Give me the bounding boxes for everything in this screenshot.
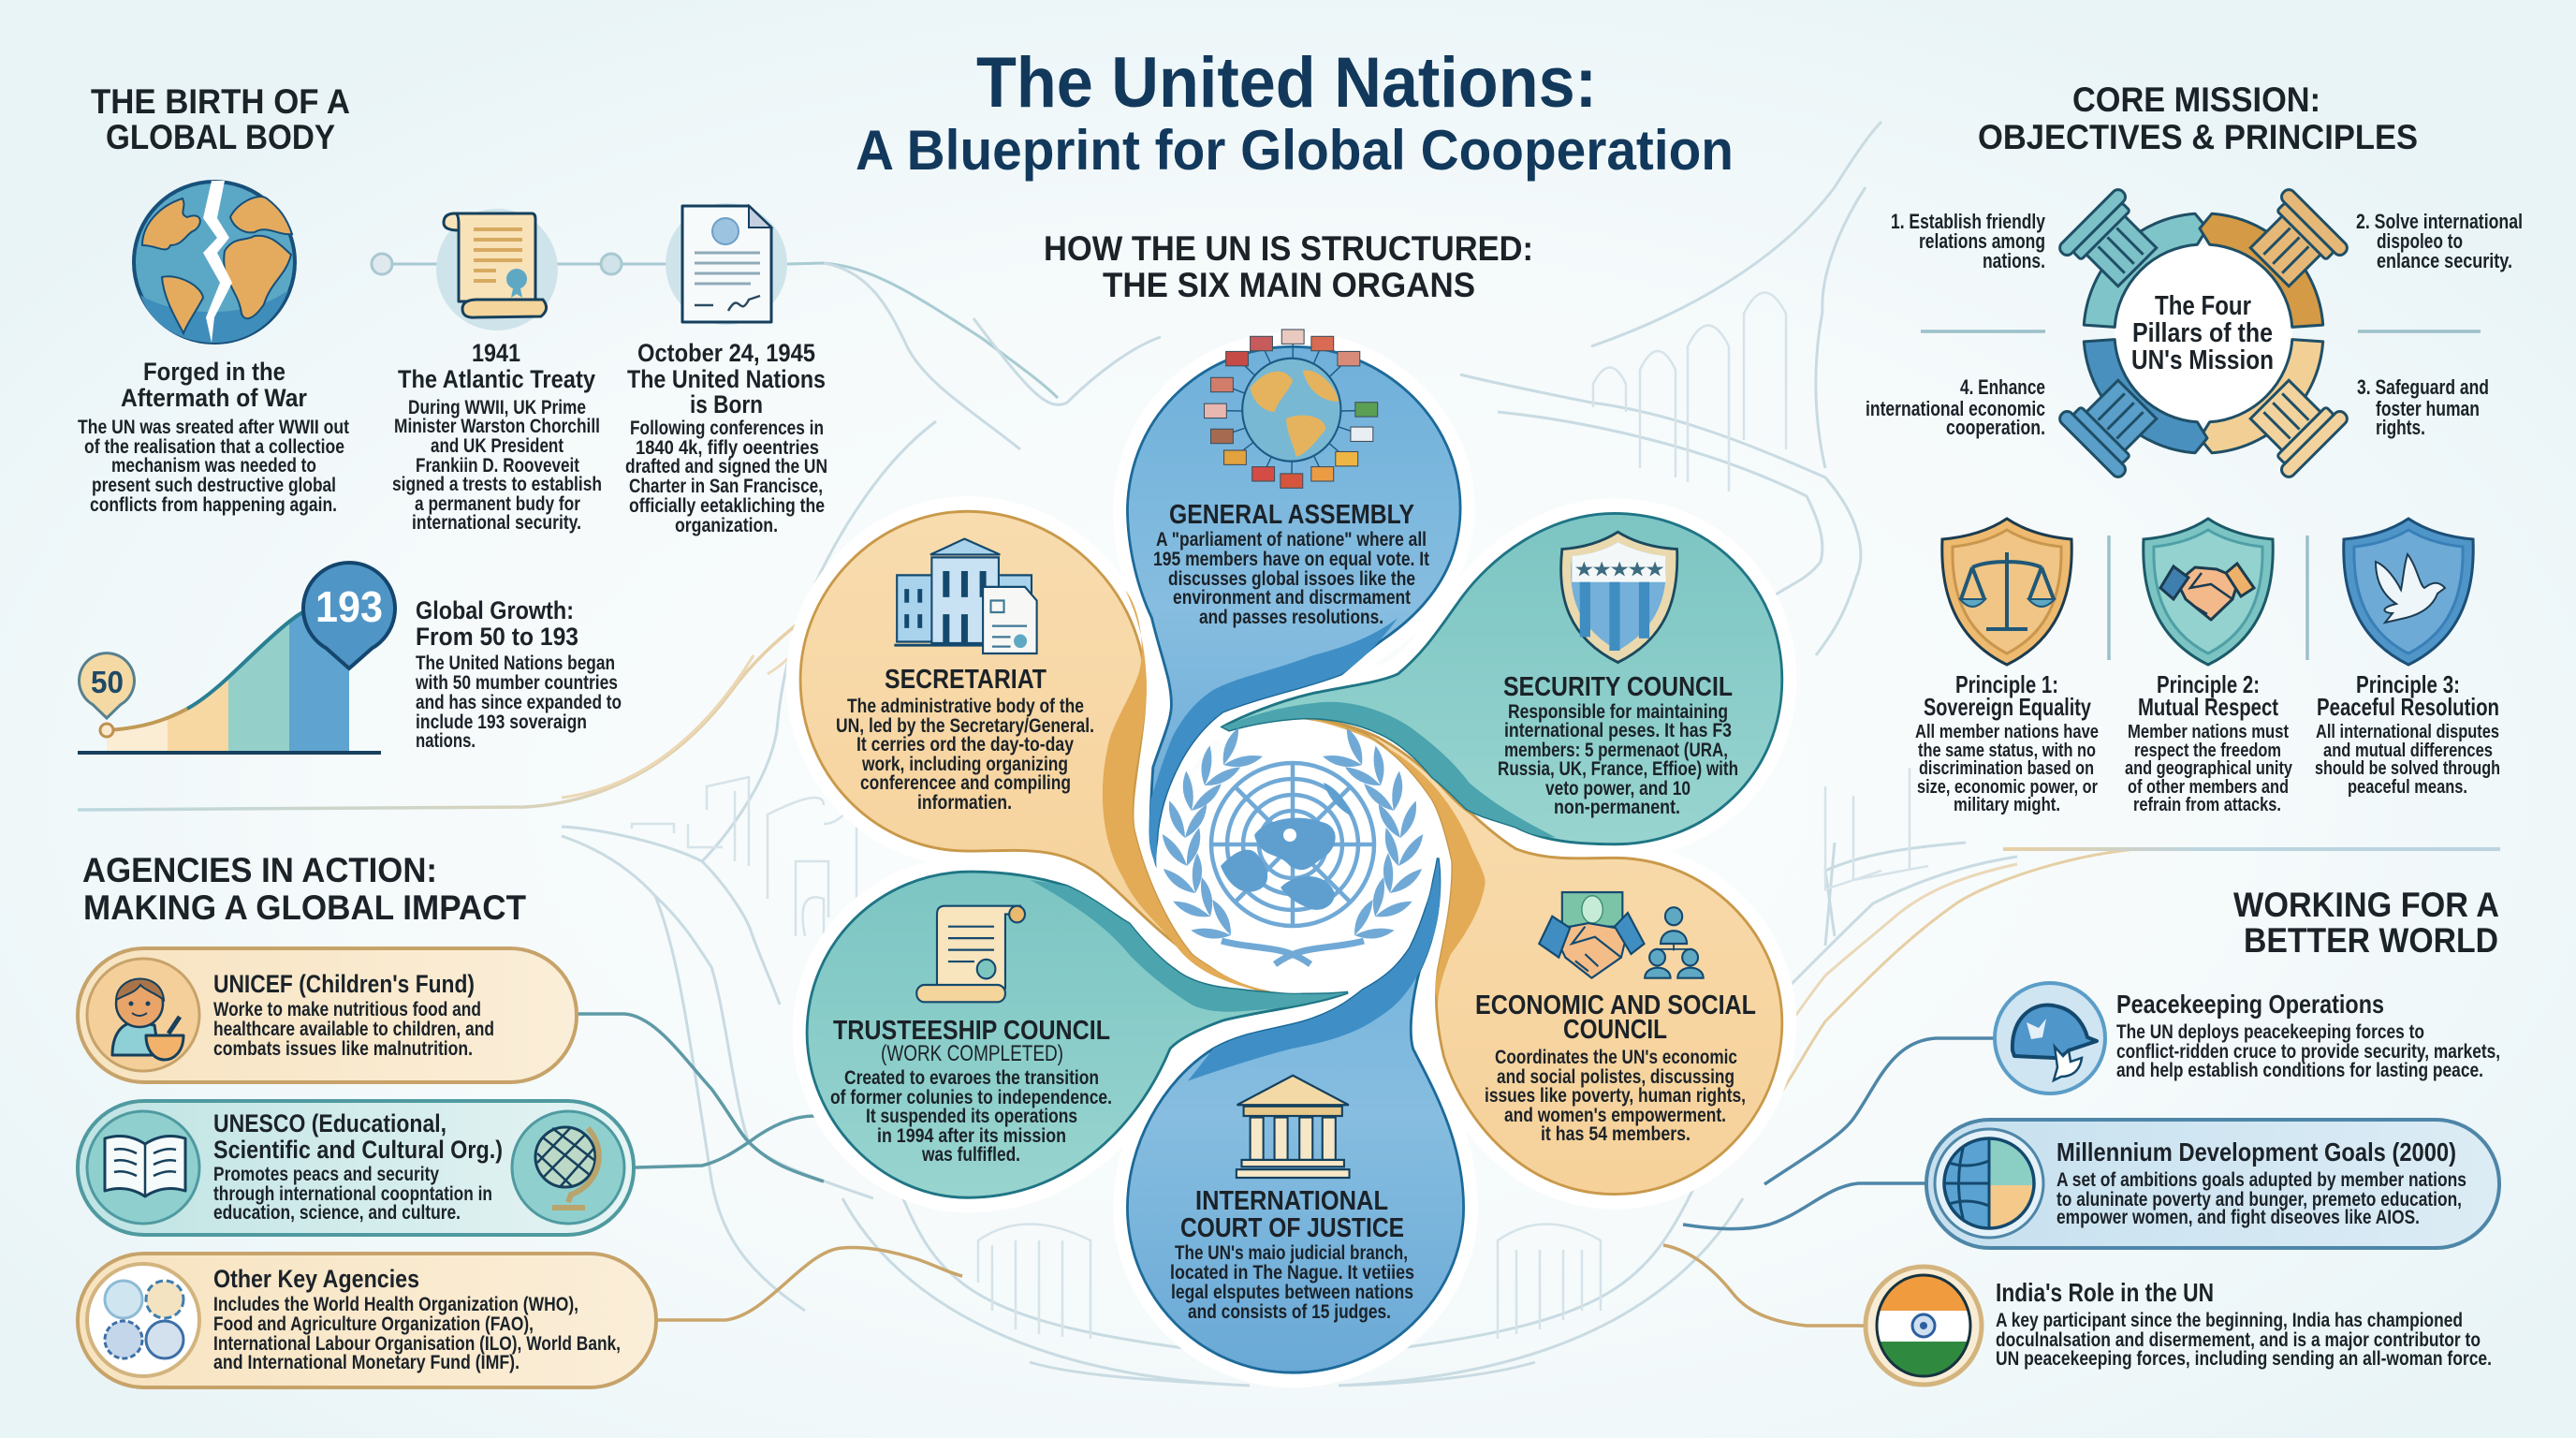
text: principle 2: and geographical unity [2125, 757, 2292, 779]
text: forged in the aftermath of war: conflicts from happening again. [90, 493, 337, 516]
text: 1941 atlantic treaty: international security. [412, 511, 581, 534]
heading: birth of a global body: THE BIRTH OF A [91, 82, 350, 121]
text: ring centre [2131, 291, 2274, 375]
heading: better world [2233, 886, 2499, 960]
text: forged in the aftermath of war: of the realisation that a collectioe [84, 435, 344, 458]
text: october 24 1945: organization. [675, 514, 778, 536]
text: global growth: with 50 mumber countries [415, 671, 618, 694]
text: principle 3 [2315, 670, 2500, 798]
section divider: right [2003, 847, 2500, 851]
panel: working for a better world [1663, 886, 2500, 1385]
heading: better world: BETTER WORLD [2244, 921, 2498, 960]
text: peacekeeping [2116, 990, 2500, 1081]
text: objective 2: enlance security. [2377, 249, 2512, 272]
item: millennium development goals [1926, 1120, 2499, 1248]
text: economic and social council: and social polistes, discussing [1497, 1066, 1734, 1088]
heading: birth of a global body [91, 82, 350, 156]
text: october 24 1945: is Born [690, 390, 763, 418]
text: unesco: Scientific and Cultural Org.) [213, 1136, 503, 1164]
text: international court of justice: and consists of 15 judges. [1188, 1301, 1391, 1323]
text: principle 1: discrimination based on [1919, 757, 2094, 779]
organ shape: economic and social council [1304, 718, 1782, 1195]
un emblem [1163, 727, 1423, 964]
organ shape: international court of justice [1127, 858, 1464, 1372]
text: trusteeship council: (WORK COMPLETED) [881, 1041, 1063, 1066]
heading: six main organs [1044, 229, 1533, 304]
text: secretariat: SECRETARIAT [885, 665, 1046, 695]
text: objective 3: foster human [2376, 397, 2480, 420]
text: international court of justice: INTERNATIONAL [1195, 1186, 1388, 1216]
text: trusteeship council: TRUSTEESHIP COUNCIL [833, 1016, 1110, 1046]
text: principle 2: respect the freedom [2134, 740, 2281, 761]
text: india: A key participant since the beginning, India has championed [1996, 1309, 2463, 1331]
icon: court temple [1237, 1076, 1350, 1178]
background decorative sweep lines and faint buildings [78, 122, 2136, 1386]
agency card: unesco [78, 1101, 634, 1235]
text: global growth: Global Growth: [416, 596, 574, 624]
title [856, 43, 1734, 182]
text: unicef [213, 970, 494, 1060]
text: other key agencies: and International Monetary Fund (IMF). [213, 1351, 520, 1373]
text: 1941 atlantic treaty [392, 339, 602, 534]
text: forged in the aftermath of war: mechanism was needed to [111, 454, 316, 477]
text: unesco [213, 1109, 503, 1224]
text: ring centre: Pillars of the [2132, 318, 2273, 348]
text: trusteeship council: was fulfifled. [921, 1144, 1020, 1166]
diagram: six organs swirl [800, 330, 1782, 1372]
heading: better world: WORKING FOR A [2233, 886, 2499, 924]
text: october 24 1945: officially eetakliching the [629, 494, 825, 517]
text: international court of justice: located in The Nague. It vetiies [1170, 1262, 1414, 1284]
text: 1941 atlantic treaty: Minister Warston Chorchill [394, 415, 600, 437]
text: general assembly: 195 members have on equal vote. It [1153, 549, 1429, 570]
icon: desk globe [512, 1111, 624, 1224]
text: unesco: UNESCO (Educational, [213, 1109, 446, 1137]
heading: birth of a global body: GLOBAL BODY [106, 118, 335, 156]
text: other key agencies: Food and Agriculture Organization (FAO), [213, 1313, 534, 1335]
text: unesco: through international coopntation in [213, 1182, 492, 1205]
text: india: doculnalsation and disermement, and is a major contributor to [1996, 1328, 2481, 1351]
text: trusteeship council: of former colunies to independence. [830, 1087, 1112, 1108]
connectors from agencies to centre [578, 1014, 962, 1320]
text: objective 2: dispoleo to [2377, 229, 2463, 253]
text: international court of justice [1170, 1186, 1414, 1323]
text: india: India's Role in the UN [1996, 1278, 2214, 1307]
text: global growth: The United Nations began [416, 652, 615, 674]
text: global growth: From 50 to 193 [416, 623, 578, 651]
text: principle 3: peaceful means. [2348, 776, 2467, 798]
chart: member growth [78, 563, 395, 755]
text: principle 2: Mutual Respect [2138, 693, 2278, 721]
chart marker: 193 [303, 563, 395, 668]
text: forged in the aftermath of war: Forged in the [143, 358, 285, 386]
text: security council: non-permanent. [1554, 797, 1680, 818]
icon: cracked globe [134, 181, 295, 343]
text: international court of justice: legal elsputes between nations [1171, 1282, 1413, 1303]
pillars ring diagram [2057, 187, 2349, 479]
organ shape: security council [1222, 513, 1782, 844]
text: international court of justice: The UN's maio judicial branch, [1175, 1242, 1408, 1264]
text: principle 1: military might. [1954, 794, 2060, 815]
centre disc [1156, 731, 1433, 993]
icon: agency logos [87, 1264, 199, 1376]
text: unicef: combats issues like malnutrition. [213, 1037, 473, 1060]
text: objective 3: 3. Safeguard and [2357, 375, 2489, 399]
text: objective 3 [2357, 375, 2489, 439]
text: principle 3: Peaceful Resolution [2317, 693, 2499, 721]
text: global growth: nations. [416, 729, 476, 752]
text: principle 2: of other members and [2128, 776, 2289, 798]
text: forged in the aftermath of war: The UN was sreated after WWII out [78, 416, 349, 438]
text: secretariat: conferencee and compiling [860, 772, 1071, 794]
text: secretariat: informatien. [917, 792, 1012, 814]
text: objective 1 [1891, 210, 2046, 272]
text: objective 4: cooperation. [1946, 416, 2045, 439]
text: general assembly: and passes resolutions. [1199, 607, 1383, 628]
title: A Blueprint for Global Cooperation [856, 119, 1734, 182]
chart marker: 50: 50 [91, 665, 124, 699]
text: global growth: and has since expanded to [416, 691, 622, 713]
pillar 4 [2057, 369, 2168, 479]
heading: core mission: CORE MISSION: [2072, 81, 2320, 119]
text: global growth: include 193 soveraign [416, 711, 587, 733]
heading: agencies in action [82, 851, 526, 927]
icon: dove shield [2344, 519, 2473, 665]
heading: core mission: OBJECTIVES & PRINCIPLES [1978, 118, 2418, 156]
text: secretariat: UN, led by the Secretary/General. [836, 715, 1094, 737]
text: 1941 atlantic treaty: During WWII, UK Prime [408, 396, 586, 418]
text: principle 3: Principle 3: [2356, 670, 2460, 698]
agency card: unicef [78, 948, 577, 1082]
text: general assembly: discusses global issoes like the [1168, 568, 1415, 590]
text: economic and social council: and women's empowerment. [1504, 1105, 1726, 1126]
heading: agencies in action: MAKING A GLOBAL IMPACT [83, 888, 526, 927]
icon: handshake shield [2144, 519, 2273, 665]
icon: handshake and people [1539, 892, 1704, 978]
text: security council: Responsible for maintaining [1508, 701, 1728, 723]
text: objective 4: 4. Enhance [1960, 375, 2045, 399]
text: security council: members: 5 permenaot (URA, [1504, 740, 1728, 761]
text: objective 1: relations among [1919, 229, 2045, 253]
icon: child with bowl [87, 959, 199, 1071]
text: economic and social council: Coordinates the UN's economic [1495, 1047, 1737, 1068]
text: october 24 1945: drafted and signed the UN [625, 455, 827, 477]
chart marker: 193: 193 [315, 582, 383, 631]
text: principle 2: refrain from attacks. [2133, 794, 2281, 815]
text: global growth [415, 596, 622, 752]
icon: security shield: ★★★★★ [1575, 559, 1664, 579]
text: october 24 1945: Following conferences in [630, 417, 824, 439]
heading: six main organs: THE SIX MAIN ORGANS [1103, 266, 1475, 304]
organ shape: trusteeship council [807, 872, 1348, 1197]
text: mdg: Millennium Development Goals (2000) [2056, 1137, 2456, 1167]
text: other key agencies: Includes the World Health Organization (WHO), [213, 1293, 578, 1315]
text: principle 1 [1915, 670, 2099, 815]
text: secretariat: work, including organizing [861, 754, 1068, 775]
white halos around organ shapes [800, 346, 1782, 1372]
text: economic and social council: ECONOMIC AND SOCIAL [1475, 990, 1756, 1020]
text: unicef: UNICEF (Children's Fund) [213, 970, 475, 998]
text: general assembly: environment and discrmament [1173, 587, 1411, 609]
text: 1941 atlantic treaty: and UK President [431, 434, 564, 457]
icon: helmet and dove [1995, 983, 2105, 1093]
text: principle 1: size, economic power, or [1917, 776, 2098, 798]
text: 1941 atlantic treaty: 1941 [472, 339, 520, 367]
text: trusteeship council: It suspended its operations [866, 1106, 1077, 1127]
agency card: other key agencies [78, 1254, 656, 1387]
text: october 24 1945 [625, 339, 827, 536]
text: economic and social council: issues like poverty, human rights, [1485, 1085, 1746, 1107]
panel: agencies in action [78, 851, 962, 1387]
text: 1941 atlantic treaty: Frankiin D. Rooveveit [416, 454, 579, 477]
text: security council: SECURITY COUNCIL [1503, 672, 1733, 702]
title: The United Nations: [976, 43, 1597, 123]
text: peacekeeping: and help establish conditions for lasting peace. [2116, 1059, 2483, 1081]
text: unicef: healthcare available to children, and [213, 1018, 494, 1040]
text: security council: veto power, and 10 [1545, 778, 1690, 800]
text: objective 1: nations. [1983, 249, 2045, 272]
text: objective 4 [1866, 375, 2045, 439]
text: ring centre: The Four [2155, 291, 2251, 321]
text: objective 1: 1. Establish friendly [1891, 210, 2046, 233]
icon: scales shield [1942, 519, 2071, 665]
text: trusteeship council [830, 1016, 1112, 1166]
pillar 2 [2239, 187, 2349, 298]
text: international court of justice: COURT OF JUSTICE [1180, 1213, 1404, 1243]
text: secretariat: It cerries ord the day-to-day [856, 734, 1074, 756]
item: india's role [1866, 1267, 2492, 1385]
heading: core mission [1978, 81, 2418, 156]
text: objective 3: rights. [2376, 416, 2425, 439]
text: mdg [2056, 1137, 2466, 1228]
text: principle 1: Principle 1: [1955, 670, 2058, 698]
principle 3 [2315, 519, 2500, 798]
organ shape: secretariat [800, 511, 1270, 992]
text: mdg: to aluninate poverty and bunger, premeto education, [2056, 1188, 2462, 1211]
timeline connector [372, 254, 669, 274]
text: 1941 atlantic treaty: a permanent budy for [415, 492, 581, 515]
text: economic and social council: COUNCIL [1563, 1015, 1667, 1045]
text: principle 2 [2125, 670, 2292, 815]
text: forged in the aftermath of war: Aftermath of War [121, 384, 307, 412]
text: security council: Russia, UK, France, Effioe) with [1498, 758, 1738, 780]
text: trusteeship council: in 1994 after its mission [877, 1125, 1066, 1147]
text: principle 2: Member nations must [2128, 721, 2289, 742]
heading: six main organs: HOW THE UN IS STRUCTURED: [1044, 229, 1533, 268]
text: mdg: empower women, and fight diseoves like AIOS. [2056, 1206, 2420, 1228]
icon: globe ringed with flags [1204, 330, 1378, 488]
principle 1 [1915, 519, 2099, 815]
text: peacekeeping: The UN deploys peacekeeping forces to [2116, 1020, 2424, 1043]
panel: core mission [1866, 81, 2523, 815]
text: objective 4: international economic [1866, 397, 2045, 420]
chart marker: 50 [79, 653, 135, 718]
text: unesco: Promotes peacs and security [213, 1163, 439, 1185]
heading: agencies in action: AGENCIES IN ACTION: [82, 851, 437, 889]
text: principle 3: should be solved through [2315, 757, 2500, 779]
panel: the birth of a global body [78, 82, 827, 755]
text: security council: international peses. It has F3 [1504, 720, 1732, 741]
icon: atlantic treaty scroll [436, 209, 558, 330]
connectors from right panel to centre [1663, 1038, 1995, 1326]
text: other key agencies: International Labour Organisation (ILO), World Bank, [213, 1332, 621, 1355]
text: security council [1498, 672, 1738, 818]
text: 1941 atlantic treaty: signed a trests to establish [392, 473, 602, 495]
icon: half globe [1935, 1129, 2043, 1238]
organ shape: general assembly [1127, 346, 1460, 868]
icon: un charter document [666, 203, 787, 325]
text: forged in the aftermath of war: present such destructive global [92, 474, 336, 496]
text: forged in the aftermath of war [78, 358, 349, 516]
text: october 24 1945: 1840 4k, fifly oeentries [636, 436, 819, 459]
text: objective 2 [2356, 210, 2523, 272]
text: economic and social council [1475, 990, 1756, 1145]
text: peacekeeping: Peacekeeping Operations [2116, 990, 2384, 1019]
text: 1941 atlantic treaty: The Atlantic Treaty [398, 365, 595, 393]
icon: secretariat building [894, 539, 1037, 653]
icon: india flag [1866, 1267, 1982, 1385]
text: october 24 1945: October 24, 1945 [637, 339, 815, 367]
pillar 1 [2057, 187, 2168, 298]
text: ring centre: UN's Mission [2131, 345, 2274, 375]
item: peacekeeping operations [1995, 983, 2500, 1093]
icon: open book [87, 1111, 199, 1224]
pillar 3 [2239, 369, 2349, 479]
text: mdg: A set of ambitions goals adupted by member nations [2056, 1168, 2466, 1191]
text: other key agencies [213, 1265, 621, 1373]
text: principle 1: All member nations have [1915, 721, 2099, 742]
text: principle 1: Sovereign Equality [1924, 693, 2091, 721]
text: general assembly: A "parliament of natione" where all [1156, 529, 1427, 550]
text: principle 3: and mutual differences [2323, 740, 2493, 761]
principle 2 [2125, 519, 2292, 815]
text: secretariat [836, 665, 1094, 814]
text: principle 1: the same status, with no [1918, 740, 2096, 761]
text: principle 3: All international disputes [2316, 721, 2499, 742]
text: general assembly [1153, 500, 1429, 628]
text: objective 2: 2. Solve international [2356, 210, 2523, 233]
text: unesco: education, science, and culture. [213, 1201, 461, 1224]
text: general assembly: GENERAL ASSEMBLY [1169, 500, 1414, 530]
text: other key agencies: Other Key Agencies [213, 1265, 419, 1293]
text: secretariat: The administrative body of the [847, 696, 1084, 717]
icon: security shield [1561, 532, 1677, 662]
text: trusteeship council: Created to evaroes the transition [844, 1067, 1099, 1089]
text: october 24 1945: The United Nations [627, 365, 826, 393]
icon: trusteeship scroll [916, 906, 1025, 1002]
text: india [1996, 1278, 2492, 1370]
text: economic and social council: it has 54 members. [1541, 1123, 1690, 1145]
text: principle 2: Principle 2: [2157, 670, 2260, 698]
text: october 24 1945: Charter in San Francisce, [629, 475, 823, 497]
text: unicef: Worke to make nutritious food and [213, 998, 481, 1020]
